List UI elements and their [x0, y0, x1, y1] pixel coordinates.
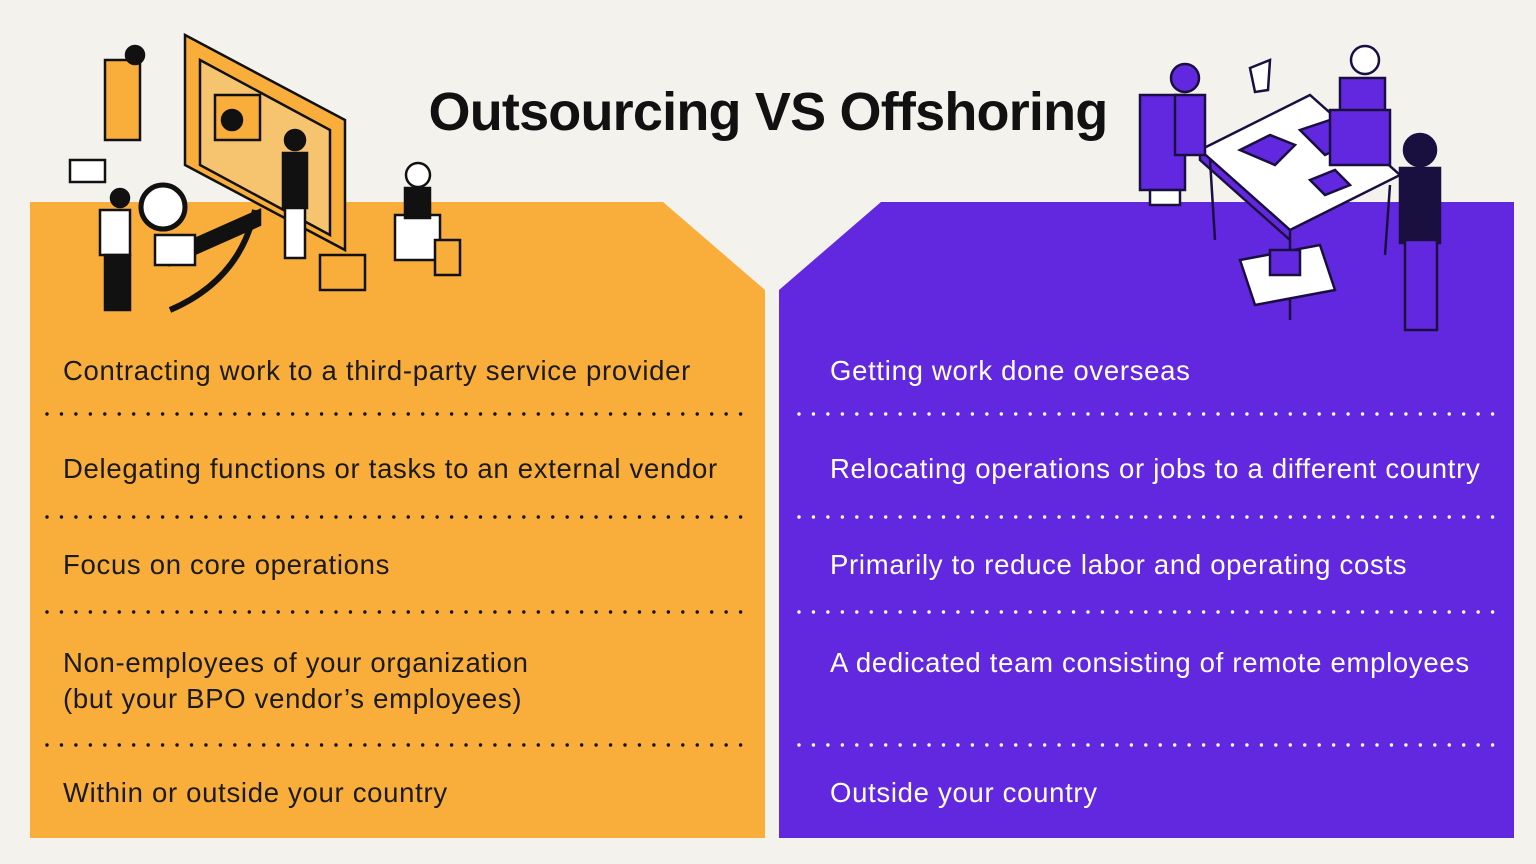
panel: outsourcing	[30, 202, 765, 838]
text: outsourcing item 3: Focus on core operations	[63, 549, 390, 580]
title: Outsourcing VS Offshoring	[428, 82, 1108, 142]
text: outsourcing item 1: Contracting work to a third-party service provider	[63, 355, 691, 386]
illustration: outsourcing workspace	[70, 35, 460, 310]
text: outsourcing item 4: (but your BPO vendor’s employees)	[63, 683, 522, 714]
text: outsourcing item 4: Non-employees of your organization	[63, 647, 529, 678]
text: offshoring item 5: Outside your country	[830, 777, 1098, 808]
text: outsourcing item 4	[63, 647, 529, 714]
text: offshoring item 2: Relocating operations or jobs to a different country	[830, 453, 1480, 484]
text: offshoring item 4: A dedicated team consisting of remote employees	[830, 647, 1470, 678]
text: outsourcing item 2: Delegating functions or tasks to an external vendor	[63, 453, 718, 484]
text: offshoring item 1: Getting work done overseas	[830, 355, 1191, 386]
illustration: offshoring team	[1140, 46, 1440, 330]
panel: offshoring	[779, 202, 1514, 838]
text: outsourcing item 5: Within or outside your country	[63, 777, 448, 808]
text: offshoring item 3: Primarily to reduce labor and operating costs	[830, 549, 1407, 580]
